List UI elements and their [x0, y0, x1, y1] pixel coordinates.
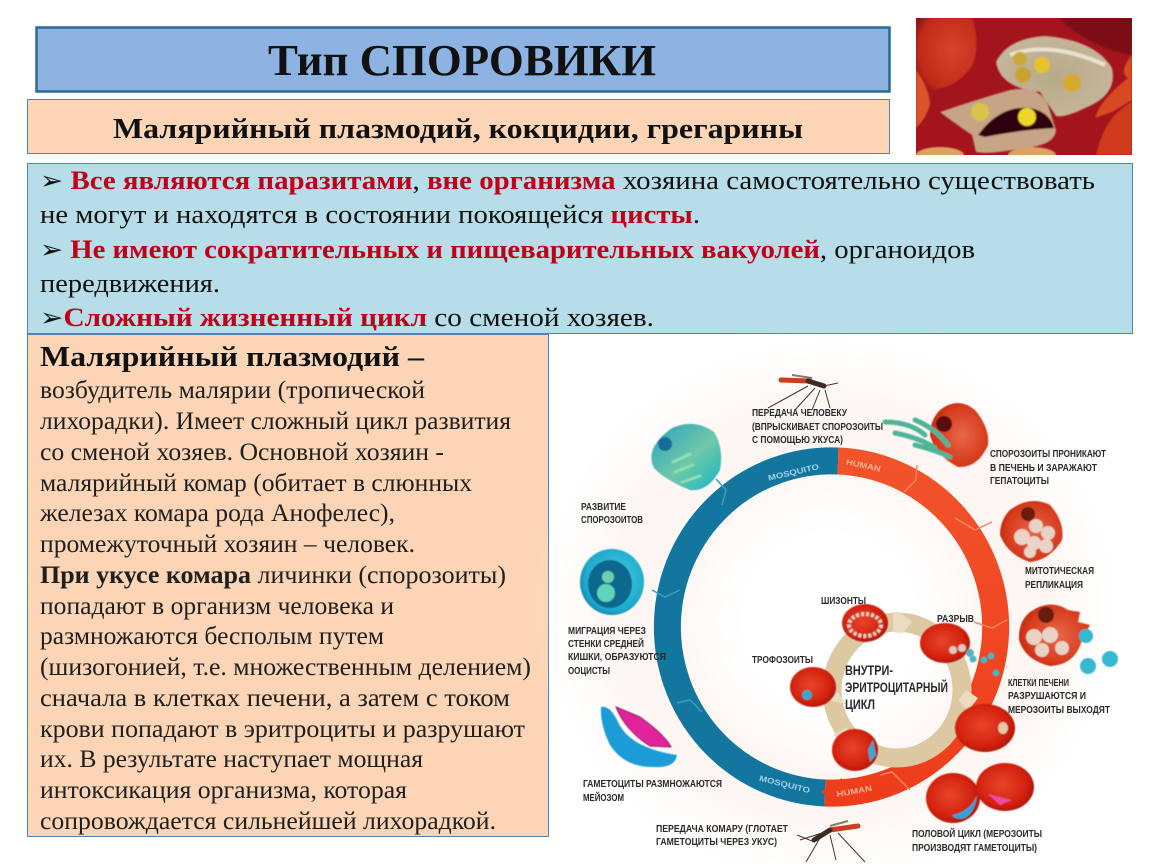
icon: oocyst cell: [580, 549, 644, 615]
icon: rupture cell: [920, 623, 974, 663]
diagram labels: [568, 407, 1110, 854]
label: mosquito top: MOSQUITO: [767, 462, 820, 483]
inner ring: erythrocytic cycle: [826, 612, 978, 758]
description text: попадают в организм человека и: [40, 593, 394, 620]
description text: крови попадают в эритроциты и разрушают: [40, 716, 525, 743]
label: sporozoites enter liver: В ПЕЧЕНЬ И ЗАРАЖАЮТ: [990, 462, 1097, 474]
label: liver cells destroyed: КЛЕТКИ ПЕЧЕНИ: [1008, 677, 1069, 689]
label: sexual cycle: ПОЛОВОЙ ЦИКЛ (МЕРОЗОИТЫ: [912, 827, 1042, 840]
label: transmission to human: [752, 407, 883, 446]
icon: mosquito top: [768, 375, 838, 410]
label: sexual cycle: [912, 827, 1042, 854]
label: transmission to human: (ВПРЫСКИВАЕТ СПОРОЗОИТЫ: [752, 421, 883, 433]
label: midgut migration: МИГРАЦИЯ ЧЕРЕЗ: [568, 625, 646, 637]
label: rupture: РАЗРЫВ: [937, 613, 974, 625]
description text: со сменой хозяев. Основной хозяин -: [40, 439, 444, 466]
label: schizonts: ШИЗОНТЫ: [821, 595, 866, 607]
label: intraerythrocytic cycle: ВНУТРИ-: [845, 663, 893, 678]
description text: размножаются бесполым путем: [40, 623, 384, 650]
icon: released merozoites: [970, 652, 1000, 676]
label: gametocytes meiosis: МЕЙОЗОМ: [583, 791, 624, 804]
subtitle bar: Малярийный плазмодий, кокцидии, грегарины: [113, 113, 803, 145]
label: sporozoites enter liver: СПОРОЗОИТЫ ПРОНИКАЮТ: [990, 448, 1106, 460]
label: midgut migration: [568, 625, 666, 677]
subtitle bar: [28, 100, 890, 154]
icon: hepatocyte with sporozoites: [885, 403, 988, 467]
label: liver cells destroyed: МЕРОЗОИТЫ ВЫХОДЯТ: [1008, 704, 1110, 716]
label: transmission to mosquito: ГАМЕТОЦИТЫ ЧЕРЕЗ УКУС): [656, 836, 777, 848]
icon: trophozoite cell: [790, 667, 836, 707]
label: human top: HUMAN: [845, 458, 882, 474]
bullet line 2: ➢ Не имеют сократительных и пищеварительных вакуолей , органоидов: [40, 235, 975, 264]
label: intraerythrocytic cycle: ЭРИТРОЦИТАРНЫЙ: [845, 680, 948, 695]
description text: промежуточный хозяин – человек.: [40, 531, 415, 558]
description text: железах комара рода Анофелес),: [39, 500, 395, 527]
outer ring: human stage: [821, 447, 1007, 806]
label: gametocytes meiosis: ГАМЕТОЦИТЫ РАЗМНОЖАЮТСЯ: [583, 778, 722, 790]
label: human bottom: HUMAN: [836, 784, 873, 799]
life cycle diagram: [568, 375, 1118, 862]
bullet line 1: ➢ Все являются паразитами , вне организма хозяина самостоятельно существовать: [40, 166, 1095, 195]
label: midgut migration: ООЦИСТЫ: [568, 665, 610, 677]
label: midgut migration: СТЕНКИ СРЕДНЕЙ: [568, 637, 644, 650]
label: sporozoites enter liver: ГЕПАТОЦИТЫ: [990, 475, 1049, 487]
label: trophozoites: ТРОФОЗОИТЫ: [752, 654, 813, 666]
icon: gametocytes: [601, 707, 677, 767]
outer ring: mosquito stage: [652, 448, 841, 795]
icon: red blood cells with gametocytes: [926, 704, 1034, 823]
description text: малярийный комар (обитает в слюнных: [40, 470, 473, 497]
label: mitotic replication: РЕПЛИКАЦИЯ: [1025, 579, 1083, 591]
label: transmission to human: ПЕРЕДАЧА ЧЕЛОВЕКУ: [752, 407, 847, 419]
label: sporozoite development: СПОРОЗОИТОВ: [581, 514, 643, 526]
description text: возбудитель малярии (тропической: [40, 377, 425, 404]
icon: bursting liver cell: [1019, 604, 1118, 674]
label: intraerythrocytic cycle: [845, 663, 948, 712]
label: intraerythrocytic cycle: ЦИКЛ: [845, 697, 875, 712]
label: mitotic replication: [1025, 565, 1094, 591]
panel heading: Малярийный плазмодий –: [40, 341, 425, 373]
description text: [39, 377, 531, 835]
label: sexual cycle: ПРОИЗВОДЯТ ГАМЕТОЦИТЫ): [912, 842, 1037, 854]
description text: лихорадки). Имеет сложный цикл развития: [40, 408, 511, 435]
bullet line 1 continued: не могут и находятся в состоянии покоящейся цисты .: [40, 200, 700, 229]
description text: их. В результате наступает мощная: [40, 746, 424, 773]
label: transmission to mosquito: ПЕРЕДАЧА КОМАРУ (ГЛОТАЕТ: [656, 823, 788, 835]
icon: ring stage cell: [832, 729, 878, 771]
icon: sporozoite cell: [651, 424, 721, 490]
title bar: [36, 28, 890, 92]
label: sporozoites enter liver: [990, 448, 1106, 487]
label: transmission to mosquito: [656, 823, 788, 848]
description text: интоксикация организма, которая: [40, 777, 408, 804]
label: transmission to human: С ПОМОЩЬЮ УКУСА): [752, 434, 843, 446]
description text: При укусе комара личинки (спорозоиты): [40, 562, 506, 589]
icon: schizont cell: [842, 604, 888, 642]
icon: mitotic replication cell: [1000, 501, 1062, 562]
description text: сначала в клетках печени, а затем с током: [40, 685, 510, 712]
panel: general characteristics: [28, 164, 1132, 334]
description text: (шизогонией, т.е. множественным делением): [40, 654, 531, 681]
label: midgut migration: КИШКИ, ОБРАЗУЮТСЯ: [568, 651, 666, 663]
label: liver cells destroyed: РАЗРУШАЮТСЯ И: [1008, 690, 1086, 702]
label: mosquito bottom: MOSQUITO: [758, 774, 811, 795]
description text: сопровождается сильнейшей лихорадкой.: [40, 808, 496, 835]
label: sporozoite development: [581, 501, 643, 526]
icon: mosquito bottom: [797, 821, 865, 862]
title bar: Тип СПОРОВИКИ: [268, 36, 656, 85]
label: liver cells destroyed: [1008, 677, 1110, 716]
bullet line 2 continued: передвижения.: [40, 269, 220, 298]
photo: infected red blood cell: [916, 18, 1132, 163]
label: gametocytes meiosis: [583, 778, 722, 804]
label: mitotic replication: МИТОТИЧЕСКАЯ: [1025, 565, 1094, 577]
label: sporozoite development: РАЗВИТИЕ: [581, 501, 626, 513]
panel: malaria plasmodium description: [28, 334, 548, 836]
bullet line 3: ➢Сложный жизненный цикл со сменой хозяев.: [40, 303, 654, 332]
